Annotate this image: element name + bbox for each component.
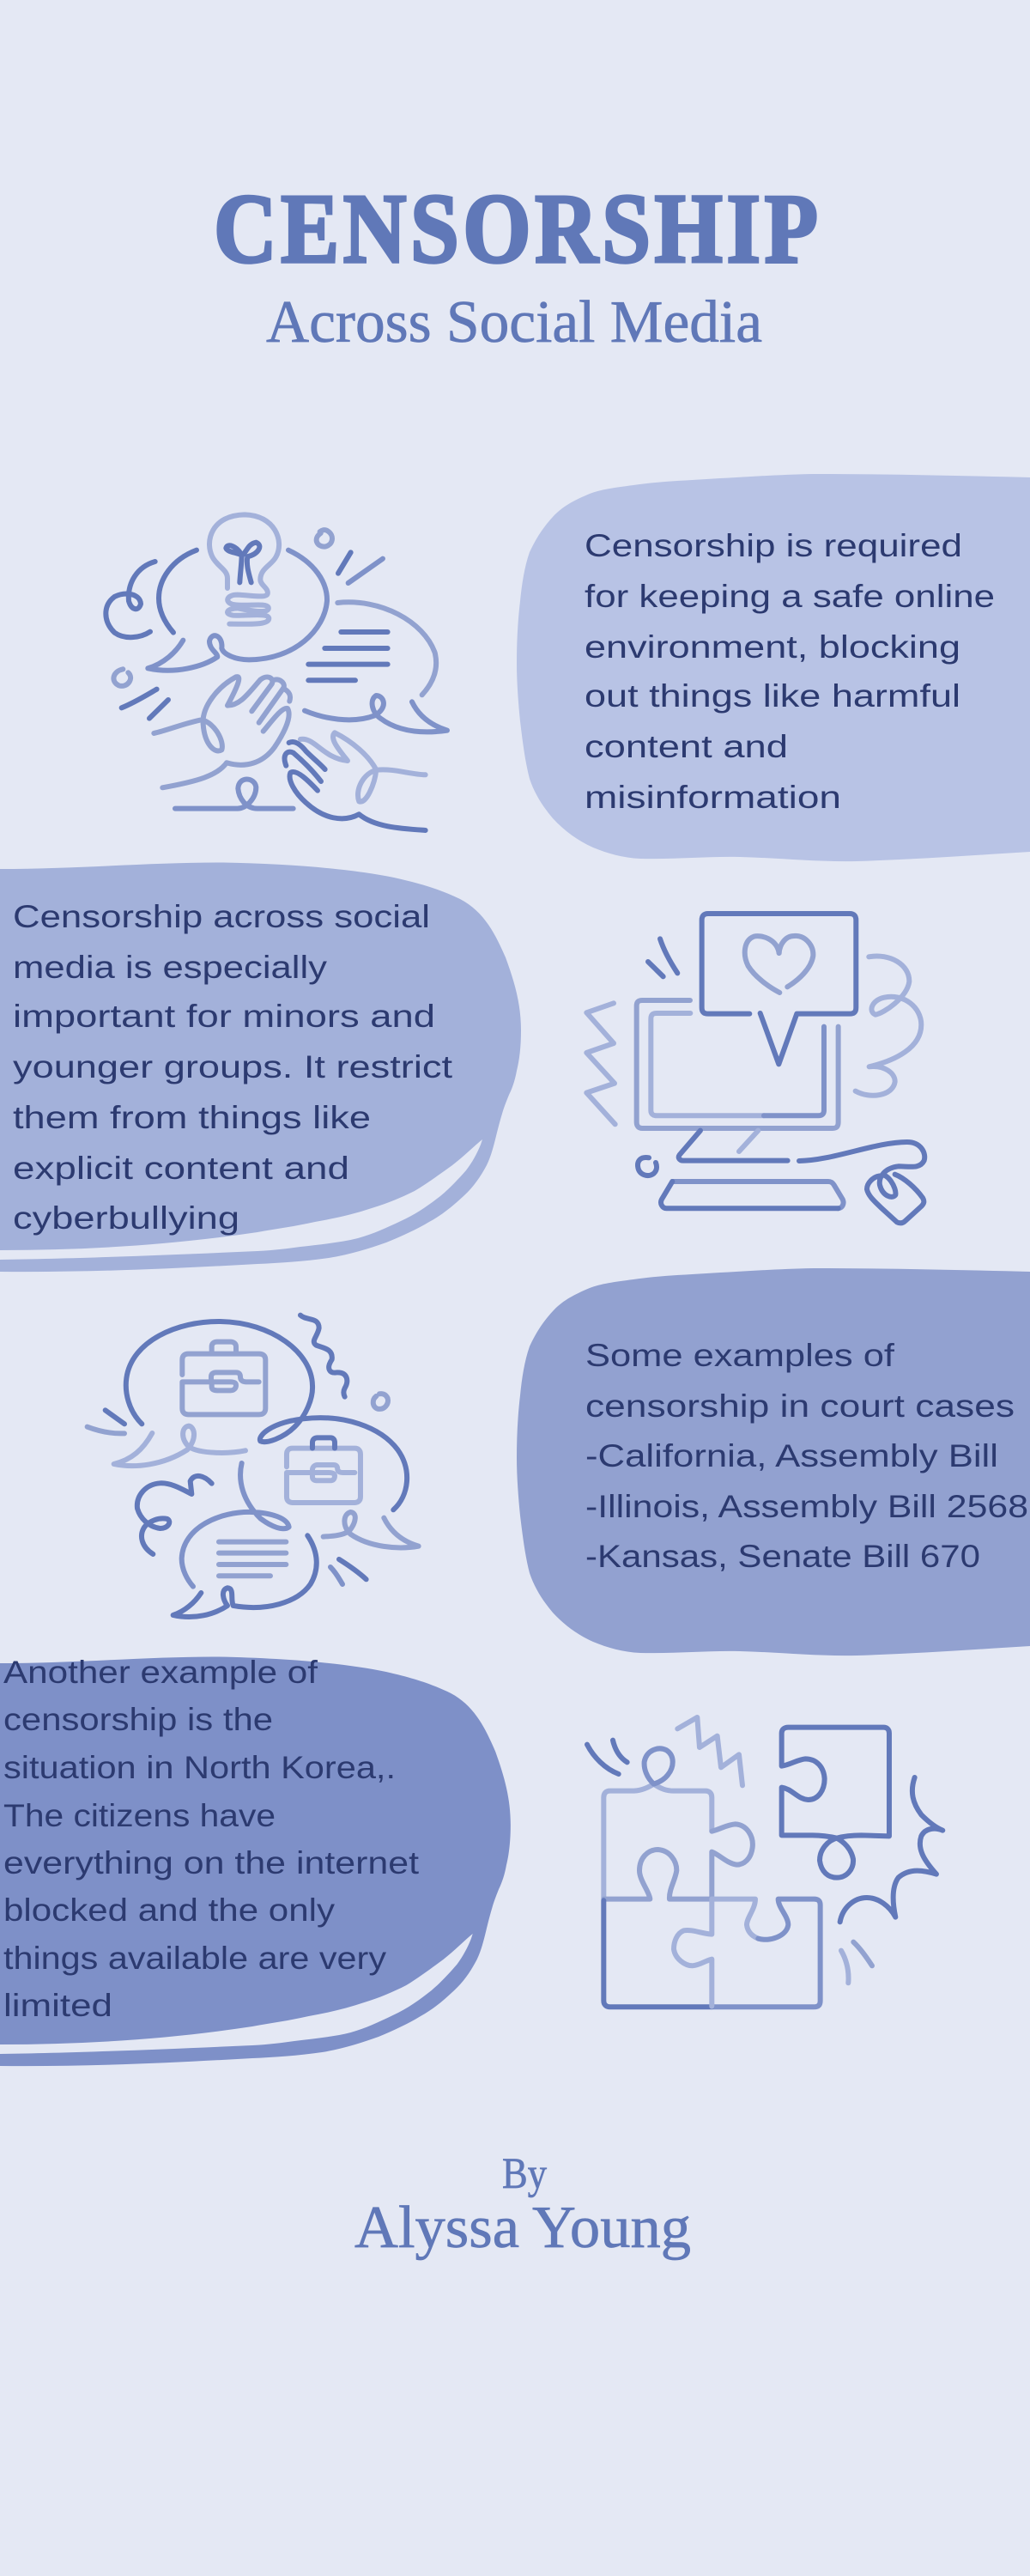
panel: safe online environment <box>517 474 1030 861</box>
panel: North Korea example: situation in North Korea,. <box>3 1749 396 1785</box>
panel: court case examples: Some examples of <box>585 1337 895 1373</box>
panel: North Korea example: everything on the internet <box>3 1844 420 1880</box>
panel: North Korea example: Another example of <box>3 1654 318 1690</box>
author credit: Alyssa Young <box>354 2195 691 2261</box>
author credit <box>354 2150 691 2261</box>
panel: safe online environment: Censorship is required <box>585 527 962 563</box>
panel: protecting younger groups: cyberbullying <box>13 1200 239 1236</box>
panel: court case examples <box>517 1268 1030 1656</box>
icon: puzzle pieces <box>587 1717 942 2007</box>
title: CENSORSHIP <box>214 173 818 283</box>
panel: protecting younger groups: Censorship across social <box>13 898 430 934</box>
panel: protecting younger groups: them from things like <box>13 1099 371 1135</box>
icon: speech bubbles with briefcases <box>88 1315 419 1617</box>
panel: safe online environment: content and <box>585 728 788 764</box>
panel: court case examples: censorship in court cases <box>585 1388 1015 1424</box>
panel: safe online environment: out things like harmful <box>585 677 960 714</box>
panel: safe online environment: environment, blocking <box>585 629 960 665</box>
subtitle: Across Social Media <box>266 289 762 355</box>
panel: protecting younger groups <box>0 862 521 1272</box>
panel: court case examples: -Kansas, Senate Bill 670 <box>585 1538 980 1574</box>
panel: North Korea example: things available are very <box>3 1940 386 1976</box>
panel: protecting younger groups: younger groups. It restrict <box>13 1048 453 1084</box>
panel: North Korea example <box>0 1654 511 2066</box>
panel: safe online environment: for keeping a safe online <box>585 578 995 614</box>
panel: protecting younger groups: media is especially <box>13 949 327 985</box>
panel: court case examples: -California, Assembly Bill <box>585 1437 998 1473</box>
panel: North Korea example: The citizens have <box>3 1797 276 1833</box>
panel: protecting younger groups: explicit content and <box>13 1150 349 1186</box>
panel: protecting younger groups: important for minors and <box>13 998 435 1034</box>
panel: North Korea example: blocked and the only <box>3 1892 335 1928</box>
panel: safe online environment: misinformation <box>585 779 841 815</box>
icon: computer with heart message and mouse <box>586 914 924 1223</box>
author credit: By <box>502 2150 547 2198</box>
panel: North Korea example: limited <box>3 1987 112 2023</box>
icon: light bulb, speech bubbles and hands <box>106 514 447 830</box>
panel: North Korea example: censorship is the <box>3 1701 273 1737</box>
panel: court case examples: -Illinois, Assembly Bill 2568 <box>585 1488 1028 1524</box>
